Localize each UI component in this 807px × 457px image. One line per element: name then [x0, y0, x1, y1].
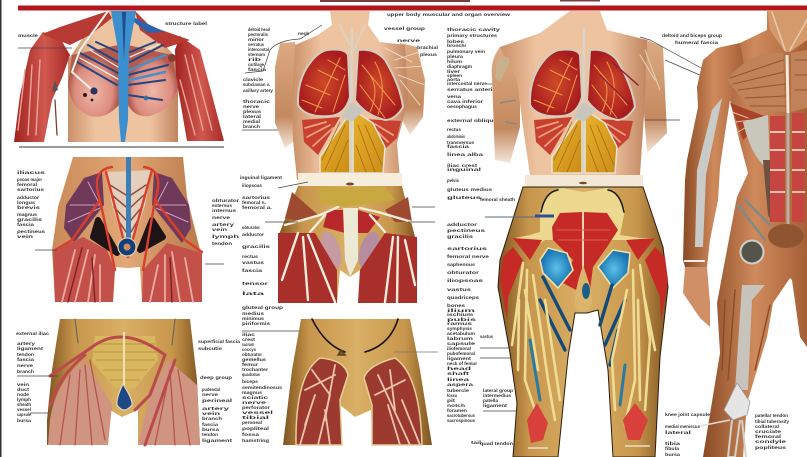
abdominal muscles — [770, 113, 805, 222]
panel: torso labels: neck — [298, 31, 309, 36]
text block: lower left labels: ligament — [17, 346, 44, 351]
text block: lower left labels right side: artery — [202, 406, 230, 411]
central striped fan — [106, 170, 152, 257]
text block: leg side labels — [480, 197, 554, 446]
text block: central labels column: femoral nerve — [447, 254, 490, 259]
left chest — [68, 45, 119, 117]
text block: lower left labels right side: bursa — [202, 427, 220, 432]
panel: lower left pelvis — [47, 319, 200, 445]
leg tendons — [735, 285, 765, 390]
text block: hip labels left: gracilis — [17, 217, 43, 222]
text block: lower centre labels: obturator — [242, 352, 262, 357]
left outer red muscle — [500, 238, 542, 320]
text block: lower left labels right side: branch — [202, 416, 222, 421]
text block: lower left labels right side — [198, 339, 240, 443]
text block: lower right column labels: capsule — [447, 341, 476, 346]
text block: figure knee labels: lateral — [665, 430, 691, 435]
figure body — [703, 10, 807, 457]
text block: hip labels left: fascia — [17, 222, 35, 227]
arm tendon — [695, 98, 722, 247]
text block: central labels column: sartorius — [447, 246, 488, 251]
panel: chest labels: muscle — [18, 33, 39, 38]
panel: shoulders and chest — [14, 11, 224, 142]
text block: panel three labels: deltoid and biceps group — [662, 33, 722, 38]
text block: labels beside chest — [242, 25, 322, 130]
text block: hip labels right: vein — [212, 227, 227, 232]
text block: lower left labels: tendon — [17, 352, 34, 357]
white tendons — [282, 207, 415, 302]
text block: hip labels left: vein — [17, 234, 33, 239]
text block: labels beside chest: sternum — [248, 52, 265, 57]
text block: central labels column: gracilis — [447, 234, 474, 239]
text block: central labels column: iliac crest — [447, 163, 478, 168]
text block: central labels column: adductor — [447, 222, 477, 227]
text block: pelvis labels left: lata — [242, 291, 265, 296]
text block: lower left labels — [16, 331, 58, 423]
text block: lower left labels right side: ligament — [202, 438, 233, 443]
text block: labels beside chest: medial — [243, 119, 260, 124]
text block: labels beside chest: subclavian v. — [243, 82, 270, 87]
text block: lower right column labels: symphysis — [447, 326, 472, 331]
trapezius muscles — [42, 11, 190, 48]
text block: lower left labels: fascia — [17, 357, 35, 362]
text block: hip labels left: iliacus — [17, 170, 46, 175]
text block: central labels column: gluteus — [447, 195, 482, 200]
text block: hip labels right: externus — [212, 203, 232, 208]
text block: lower left labels: sheath — [17, 402, 31, 407]
text block: lower right column labels: tail — [471, 440, 481, 445]
panel: upper hips muscle view — [52, 157, 202, 302]
text block: lower centre labels: gluteal group — [242, 305, 283, 310]
text block: central labels column: quadriceps — [447, 295, 480, 300]
text block: central labels column: pleura — [447, 54, 464, 59]
text block: lower centre labels: magnus — [242, 390, 262, 395]
text block: lower right column labels: linea — [447, 377, 470, 382]
text block: figure right labels: patellar tendon — [755, 413, 788, 418]
text block: hip labels right: nerve — [212, 215, 231, 220]
text block: hip labels left: sartorius — [17, 187, 45, 192]
text block: labels beside chest: branch — [243, 124, 260, 129]
right outer red muscle — [626, 238, 668, 320]
text block: figure right labels: condyle — [755, 439, 787, 444]
text block: lower right column labels: pit — [447, 398, 456, 403]
central blue vessel — [111, 11, 136, 142]
text block: central labels column: intercostal nerve — [447, 81, 487, 86]
text block: lower left labels: nerve — [17, 363, 34, 368]
text block: pelvis labels left: femoral n. — [242, 200, 266, 205]
panel: right standing figure — [683, 10, 807, 457]
text block: labels beside chest: thoracic — [243, 99, 271, 104]
panel: torso labels: upper body muscular and organ overview — [387, 12, 511, 17]
text block: pelvis labels left: gracilis — [242, 244, 271, 249]
text block: labels beside chest: cartilage — [248, 62, 264, 67]
text block: lower right column labels: ilium — [447, 308, 475, 313]
text block: pelvis labels left: tensor — [242, 281, 268, 286]
pink inner thighs — [317, 229, 345, 271]
text block: central labels column: obturator — [447, 270, 479, 275]
left red muscle cavity — [296, 358, 348, 445]
text block: central labels column: transversus — [447, 140, 474, 145]
text block: lower left labels right side: vein — [202, 411, 220, 416]
text block: lower centre labels: hamstring — [242, 438, 269, 443]
right thigh muscles — [358, 233, 417, 303]
text block: labels beside chest: fascia — [248, 67, 267, 72]
text block: lower right column labels: pubofemoral — [447, 351, 475, 356]
text block: lower left labels right side: superficial fascia — [198, 339, 240, 344]
yellow pelvis — [515, 188, 655, 250]
text block: lower right column labels: pubis — [447, 317, 477, 322]
text block: central labels column: oesophagus — [447, 104, 477, 109]
text block: central labels column: diaphragm — [447, 64, 472, 69]
text block: central labels column: linea alba — [447, 152, 484, 157]
text block: labels beside chest: deltoid head — [248, 27, 270, 32]
left edge strip — [0, 0, 2, 457]
text block: hip labels left: femoral — [17, 182, 37, 187]
text block: lower right column labels: ramus — [447, 321, 473, 326]
text block: figure knee labels: medial meniscus — [665, 424, 700, 429]
groin crease and hip detail — [738, 200, 770, 240]
left arm muscle — [14, 32, 70, 142]
text block: central labels column: liver — [447, 69, 460, 74]
text block: labels beside chest: serratus — [248, 42, 264, 47]
text block: central labels column: fascia — [447, 144, 470, 149]
text block: labels beside chest: pectoralis — [248, 32, 268, 37]
text block: leg side labels: quad tendon — [480, 441, 513, 446]
text block: labels beside chest: minor — [248, 37, 264, 42]
text block: hip labels right: artery — [212, 222, 235, 227]
text block: hip labels right: tendon — [212, 241, 232, 246]
red crossing tendons — [50, 337, 175, 445]
text block: hip labels left — [17, 170, 57, 250]
text block: leg side labels: vastus — [480, 334, 493, 339]
text block: lower right column labels: labrum — [447, 336, 473, 341]
text block: lower left labels right side: tendon — [202, 432, 218, 437]
text block: central labels column: vastus — [447, 287, 472, 292]
left thigh fibres — [48, 360, 112, 445]
panel: posterior pelvis — [283, 319, 438, 445]
text block: central labels column: saphenous — [447, 262, 476, 267]
text block: lower right column labels: acetabulum — [447, 331, 475, 336]
text block: lower centre labels: piriformis — [242, 321, 271, 326]
text block: lower right column labels: ligament — [447, 356, 472, 361]
purple right muscle — [152, 172, 191, 243]
text block: lower centre labels: sciatic — [242, 395, 269, 400]
text block: figure knee labels: bursa — [665, 452, 681, 457]
text block: figure right labels — [755, 413, 789, 450]
text block: central labels column: pelvis — [447, 178, 459, 183]
abdominal side column — [763, 160, 772, 222]
text block: central labels column: bronchi — [447, 43, 466, 48]
text block: lower centre labels: fossa — [242, 432, 260, 437]
text block: lower left labels right side: pudendal — [202, 387, 220, 392]
panel: torso labels: vessel group — [384, 26, 425, 31]
text block: lower right column labels: shaft — [447, 371, 470, 376]
text block: lower left labels: node — [17, 392, 29, 397]
text block: lower centre labels — [242, 305, 300, 443]
text block: labels beside chest: rib — [248, 57, 261, 62]
text block: lower left labels right side: subcutis — [198, 346, 223, 351]
text block: lower centre labels: iliac — [242, 332, 256, 337]
text block: lower centre labels: trochanter — [242, 367, 268, 372]
dark and blue strands — [540, 277, 625, 365]
red tendons — [55, 167, 202, 270]
panel: torso with lungs — [275, 11, 425, 180]
text block: pelvis labels left: iliopsoas — [242, 183, 262, 188]
text block: figure right labels: femoral — [755, 434, 781, 439]
left knee muscle — [527, 403, 548, 443]
text block: central labels column — [447, 27, 510, 300]
text block: pelvis labels left: rectus — [242, 254, 259, 259]
text block: figure right labels: collateral — [755, 424, 779, 429]
text block: labels beside chest: nerve — [243, 104, 260, 109]
chest muscles — [727, 53, 785, 115]
text block: lower centre labels: tibial — [242, 415, 269, 420]
left thigh muscles — [53, 237, 115, 302]
header red bar — [18, 6, 807, 10]
panel: torso labels: plexus — [420, 52, 438, 57]
text block: lower right column labels: aspera — [447, 382, 474, 387]
text block: lower centre labels: medius — [242, 311, 265, 316]
knee joint — [724, 383, 750, 420]
text block: lower left labels: branch — [17, 369, 34, 374]
text block: labels beside chest: intercostal — [248, 47, 269, 52]
text block: central labels column: thoracic cavity — [447, 27, 501, 32]
panel: torso labels: nerve — [397, 38, 421, 43]
text block: lower centre labels: popliteal — [242, 426, 269, 431]
text block: lower left labels: vessel — [17, 407, 31, 412]
text block: lower right column labels: notch — [447, 403, 465, 408]
yellow central muscle — [92, 336, 158, 388]
text block: hip labels left: psoas major — [17, 177, 42, 182]
text block: hip labels right: lymph — [212, 234, 239, 239]
right thigh muscles — [142, 243, 202, 302]
text block: lower centre labels: perforator — [242, 405, 270, 410]
right knee muscle — [623, 403, 648, 440]
text block: pelvis labels left: vastus — [242, 260, 265, 265]
yellow tendons — [512, 263, 655, 425]
central blue vessel and drop — [126, 157, 131, 240]
text block: figure right labels: cruciate — [755, 429, 782, 434]
text block: hip labels left: magnus — [17, 212, 37, 217]
text block: central labels column: inguinal — [447, 167, 481, 172]
lower central drop — [575, 265, 592, 312]
purple left muscle — [64, 172, 104, 243]
dark inner areas — [93, 220, 163, 253]
text block: lower left labels: artery — [17, 341, 36, 346]
lateral ribs — [730, 103, 767, 140]
text block: figure knee labels: tibia — [665, 441, 681, 446]
text block: lower left labels right side: perineal — [202, 398, 232, 403]
text block: lower right column labels: sacrospinous — [447, 418, 475, 423]
text block: lower centre labels: quadratus — [242, 372, 260, 377]
text block: figure right labels: popliteus — [755, 445, 787, 450]
text block: lower left labels: bursa — [17, 418, 31, 423]
text block: pelvis labels left: fascia — [242, 268, 263, 273]
text block: central labels column: iliopsoas — [447, 278, 484, 283]
panel: chest labels: structure label — [165, 21, 207, 26]
right blue muscle — [598, 250, 630, 288]
text block: lower right column labels — [447, 303, 481, 445]
text block: figure knee labels — [665, 412, 730, 457]
text block: central labels column: external oblique — [447, 118, 498, 123]
text block: pelvis labels left: adductor — [242, 232, 264, 237]
text block: central labels column: hilum — [447, 59, 462, 64]
text block: lower left labels right side: nerve — [202, 392, 219, 397]
text block: hip labels right — [205, 198, 239, 264]
neck — [767, 10, 807, 52]
text block: hip labels right: internus — [212, 208, 237, 213]
text block: lower centre labels: biceps — [242, 379, 258, 384]
text block: lower centre labels: minimus — [242, 316, 265, 321]
text block: lower left labels: duct — [17, 387, 30, 392]
text block: lower right column labels: bones — [447, 303, 466, 308]
text block: pelvis labels left — [240, 175, 283, 296]
text block: central labels column: vena — [447, 94, 462, 99]
text block: lower left labels right side: fascia — [202, 422, 219, 427]
central red muscles — [323, 210, 380, 233]
text block: lower right column labels: ischium — [447, 312, 473, 317]
text block: lower centre labels: crest — [242, 337, 256, 342]
text block: labels beside chest: lateral — [243, 114, 261, 119]
text block: central labels column: cava inferior — [447, 99, 483, 104]
central red muscle — [552, 212, 618, 290]
text block: central labels column: gluteus medius — [447, 187, 493, 192]
text block: hip labels left: brevis — [17, 205, 41, 210]
text block: lower right column labels: sacrotuberous — [447, 413, 475, 418]
text block: central labels column: serratus anterior — [447, 87, 499, 92]
text block: central labels column: abdominis — [447, 134, 465, 139]
text block: lower left labels: vein — [17, 382, 29, 387]
text block: lower right column labels: fossa — [447, 393, 457, 398]
text block: labels beside chest: axillary artery — [243, 88, 273, 93]
text block: figure right labels: tibial tuberosity — [755, 419, 789, 424]
panel: second torso with lungs — [492, 11, 667, 175]
text block: pelvis labels left: inguinal ligament — [240, 175, 283, 180]
legs silhouette — [498, 187, 668, 457]
text block: lower centre labels: vessel — [242, 410, 273, 415]
text block: lower centre labels: peroneal — [242, 420, 262, 425]
text block: lower right column labels: neck of femur — [447, 361, 477, 366]
raised arm — [683, 43, 745, 267]
panel: torso labels — [298, 12, 511, 57]
text block: leg side labels: intermedius — [483, 393, 511, 398]
text block: leg side labels: femoral sheath — [480, 197, 515, 202]
text block: leg side labels: lateral group — [483, 388, 513, 393]
text block: lower left labels: lymph — [17, 397, 31, 402]
right thigh fibres — [138, 360, 200, 445]
text block: leg side labels: ligament — [483, 403, 508, 408]
top header dark fragment — [320, 0, 600, 2]
text block: central labels column: pectineus — [447, 228, 486, 233]
text block: lower right column labels: foramen — [447, 408, 467, 413]
text block: figure knee labels: fibula — [665, 446, 680, 451]
panel: chest labels — [18, 21, 224, 147]
panel: pelvis with thigh tendons — [265, 173, 435, 303]
right chest — [128, 45, 178, 116]
text block: figure knee labels: knee joint capsule — [665, 412, 710, 417]
text block: central labels column: rectus — [447, 127, 461, 132]
left blue muscle — [540, 248, 573, 288]
text block: lower left labels right side: deep group — [200, 375, 232, 380]
text block: lower left labels: capsule — [17, 412, 31, 417]
hand — [683, 267, 710, 327]
text block: hip labels left: pectineus — [17, 229, 46, 234]
text block: lower centre labels: gemellus — [242, 357, 267, 362]
text block: panel three labels: humeral fascia — [675, 40, 719, 45]
panel: torso labels: brachial — [417, 45, 438, 50]
text block: hip labels left: adductor — [17, 195, 39, 200]
lungs and abdominal organs — [298, 30, 403, 173]
text block: lower centre labels: nerve — [242, 400, 267, 405]
right red muscle cavity — [364, 358, 422, 445]
text block: hip labels left: longus — [17, 200, 36, 205]
text block: lower left labels: external iliac — [16, 331, 50, 336]
text block: lower centre labels: coccyx — [242, 347, 256, 352]
text block: labels beside chest: plexus — [243, 109, 262, 114]
text block: lower centre labels: semitendinosus — [242, 385, 282, 390]
central tendon and blue drop — [123, 332, 125, 385]
text block: pelvis labels left: sartorius — [242, 195, 271, 200]
abdominal wall — [743, 115, 770, 170]
text block: lower centre labels: femur — [242, 362, 258, 367]
white central tendon — [343, 208, 358, 277]
text block: leg side labels: patella — [483, 398, 498, 403]
text block: central labels column: spleen — [447, 73, 462, 78]
side muscles — [285, 192, 412, 222]
text block: central labels column: primary structures — [447, 33, 498, 38]
right arm muscle — [175, 36, 224, 141]
text block: pelvis labels left: obturator — [242, 225, 260, 230]
text block: panel three labels — [640, 33, 723, 120]
left thigh muscles — [278, 233, 337, 303]
text block: central labels column: lobes — [447, 39, 465, 44]
text block: lower right column labels: iliofemoral — [447, 346, 471, 351]
text block: lower right column labels: head — [447, 366, 471, 371]
text block: pelvis labels left: femoral a. — [242, 205, 272, 210]
text block: central labels column: pulmonary vein — [447, 49, 485, 54]
text block: central labels column: aorta — [447, 77, 461, 82]
text block: labels beside chest: clavicle — [243, 77, 264, 82]
text block: lower right column labels: tubercle — [447, 388, 470, 393]
text block: hip labels right: obturator — [212, 198, 239, 203]
panel: legs with coloured muscles — [498, 175, 668, 457]
text block: lower centre labels: sacrum — [242, 342, 254, 347]
